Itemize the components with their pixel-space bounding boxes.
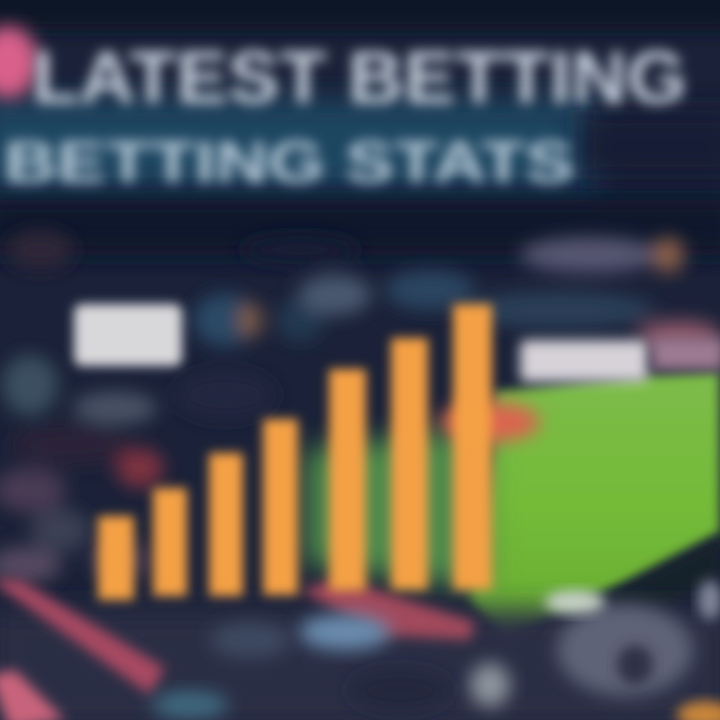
- bar 6: [391, 338, 428, 590]
- bar 1: [98, 516, 134, 600]
- headline: [0, 26, 687, 195]
- dark stand edge: [602, 534, 720, 603]
- background: dark stadium: [0, 0, 720, 238]
- title line 2: BETTING STATS: [4, 130, 574, 195]
- crowd: blurred stands: [0, 230, 720, 583]
- red players: [440, 402, 540, 442]
- bar chart: [98, 304, 492, 600]
- title line 1: LATEST BETTING: [32, 36, 687, 119]
- bar 3: [209, 453, 243, 596]
- bar 7: [453, 304, 492, 590]
- advertising board: pink: [652, 338, 720, 370]
- pitch: green field: [305, 372, 720, 638]
- advertising board: [520, 340, 648, 382]
- bar 4: [263, 419, 298, 595]
- bar 2: [153, 488, 187, 596]
- bottom stands: [0, 578, 720, 720]
- pink flare: [0, 26, 38, 98]
- bar 5: [329, 369, 366, 591]
- scoreboard: [74, 304, 182, 366]
